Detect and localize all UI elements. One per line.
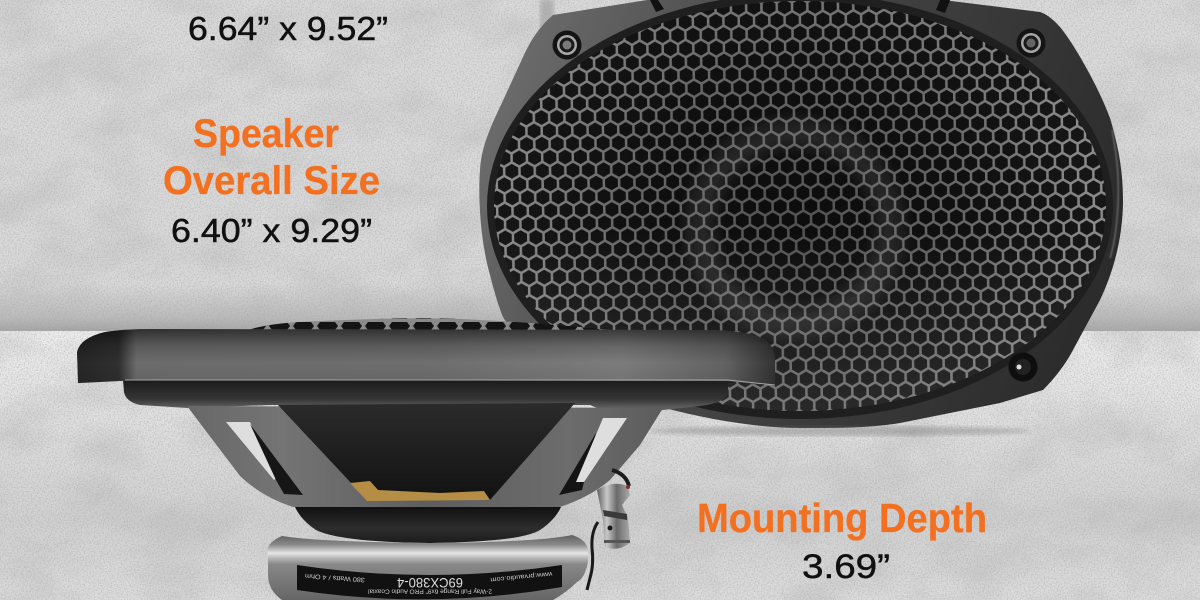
heading: Speaker Overall Size — [163, 112, 380, 203]
magnet label — [297, 565, 562, 599]
heading: Speaker Overall Size: Overall Size — [163, 159, 380, 203]
frame top notch left — [650, 0, 664, 12]
lip edge highlight — [125, 380, 775, 385]
hexagonal mesh grille — [494, 1, 1106, 411]
floor shadow under front speaker — [650, 426, 1030, 436]
mounting screw top right — [1016, 28, 1046, 58]
speaker frame — [479, 0, 1123, 428]
label description: 2-Way Full Range 6x9" PRO Audio Coaxial — [367, 588, 492, 594]
side view speaker — [77, 318, 775, 600]
grille shading — [494, 1, 1106, 411]
lower frame band — [123, 380, 728, 418]
text: overall size value: 6.40” x 9.29” — [171, 212, 372, 249]
woofer surround behind grille — [677, 110, 913, 346]
label website: www.prvaudio.com — [490, 570, 554, 583]
heading: Mounting Depth: Mounting Depth — [697, 495, 987, 541]
golden surround — [350, 481, 490, 501]
terminal wire — [587, 522, 598, 590]
mounting screw top left — [552, 30, 582, 60]
right basket window — [559, 418, 627, 495]
heading: Speaker Overall Size: Speaker — [193, 112, 339, 156]
frame dark inner band — [487, 0, 1113, 419]
frame top notch right — [936, 0, 950, 13]
cone opening — [278, 403, 575, 500]
woofer lower ring — [295, 507, 561, 543]
grille dome seen edge-on — [243, 318, 620, 334]
label model number: 69CX380-4 — [397, 575, 463, 590]
label power rating: 380 Watts / 4 Ohm — [305, 572, 365, 583]
speaker terminal — [597, 470, 630, 549]
front speaker with hex grille — [479, 0, 1123, 428]
text: top size value: 6.64” x 9.52” — [188, 10, 388, 47]
mounting screw bottom right — [1008, 352, 1038, 382]
left basket window — [226, 422, 303, 495]
magnet housing — [268, 535, 588, 600]
frame edge highlight right — [1110, 130, 1118, 258]
upper frame lip — [77, 329, 775, 385]
basket struts and lower rim — [187, 406, 663, 507]
grille lower light — [494, 1, 1106, 411]
text: mounting depth value: 3.69” — [802, 548, 890, 586]
